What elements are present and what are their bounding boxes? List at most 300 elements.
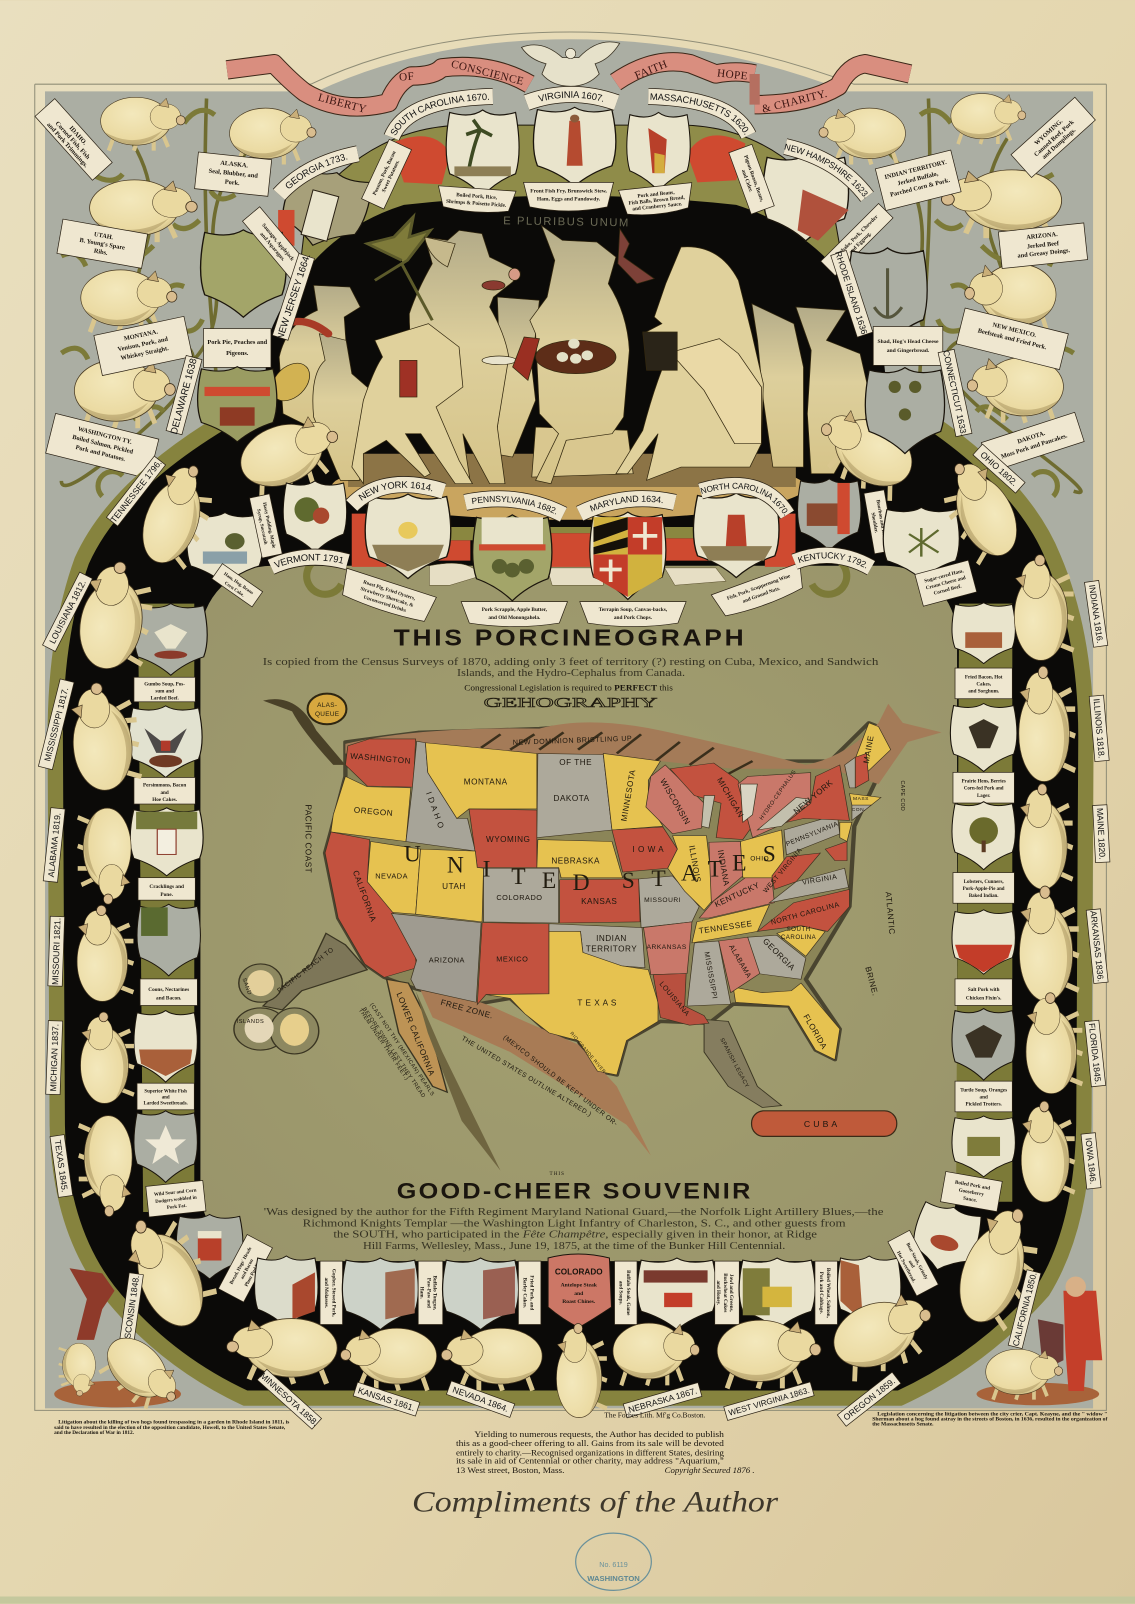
shield: Colorado: and: [574, 1291, 584, 1297]
Rhode Island shield: [848, 248, 927, 345]
food label: Buffalo Steak, Game: [625, 1270, 631, 1316]
food: Virginia: Ham, Eggs and Pandowdy.: [537, 197, 601, 203]
food label: Cracklings and: [149, 884, 184, 890]
food: New Jersey: [203, 329, 271, 367]
state banner: [1089, 695, 1109, 762]
state names: I O W A: [632, 845, 664, 854]
Spanish Legacy leg: [704, 1019, 782, 1107]
banner: Maryland: MARYLAND 1634.: [590, 496, 663, 512]
food label: Boiled Wheat, Salmon,: [825, 1268, 831, 1318]
food label: [218, 1234, 272, 1302]
food label: Pone.: [160, 892, 174, 898]
pig: West Virginia: [717, 1320, 821, 1388]
title: THIS PORCINEOGRAPH: [394, 625, 746, 651]
food label: Cakes,: [976, 681, 992, 687]
state names: WASHINGTON: [350, 751, 411, 766]
state banner: [50, 1135, 73, 1197]
pig: Dakota: [967, 357, 1063, 423]
banner: New York: [346, 476, 446, 512]
state names: CON.: [852, 807, 866, 813]
pig: California: [947, 1193, 1051, 1340]
food label: Baked Indian.: [969, 894, 998, 899]
footnote left: [54, 1421, 290, 1436]
shield: [134, 604, 207, 675]
food label: Gumbo Soup, Pos-: [144, 681, 185, 687]
food label: Lobsters, Cunners,: [964, 880, 1004, 885]
shield: Tennessee: [187, 513, 263, 584]
Sandwich Islands: [234, 964, 319, 1054]
food: Massachusetts: [619, 183, 695, 218]
food: New Hampshire tag: [729, 144, 774, 214]
front pig left: [233, 408, 348, 503]
pig: Mississippi: [68, 680, 142, 793]
food label: Gooseberry: [958, 1187, 985, 1198]
publisher note: its sale in aid of Centennial or other charity, may address "Aquarium,": [456, 1457, 724, 1466]
pink ribbon motto: FAITH: [633, 58, 669, 82]
coastline: [325, 723, 891, 1075]
label: Wyoming: WYOMING.: [1033, 118, 1065, 147]
state names: INDIAN: [596, 934, 627, 943]
state banner: [1081, 1133, 1101, 1189]
shield: [129, 706, 202, 777]
state names: ISLANDS: [237, 1019, 264, 1025]
food: New Jersey: Pigeons.: [226, 350, 249, 357]
state names: PACIFIC REACH TO: [276, 946, 335, 995]
state names: MASS: [853, 796, 869, 802]
food label: [320, 1261, 343, 1325]
motto: E PLURIBUS UNUM: [503, 215, 630, 229]
banner: Delaware: DELAWARE 1638.: [169, 355, 200, 436]
vines left: [61, 99, 245, 496]
wee pig on right: [654, 339, 761, 444]
state names: CAROLINA: [781, 934, 817, 941]
food label: Chicken Fixin's.: [966, 995, 1002, 1001]
fish: [618, 229, 654, 284]
shield: [637, 1258, 717, 1330]
label: Utah: UTAH.: [93, 231, 114, 241]
New Jersey shield: [201, 230, 286, 317]
green strip at bottom edge: [0, 1596, 1135, 1604]
state names: KANSAS: [581, 897, 617, 906]
state names: DAKOTA: [554, 794, 590, 803]
state names: MISSISSIPPI: [702, 951, 719, 1000]
label: Washington Territory: [46, 413, 159, 479]
shield: Colorado: COLORADO: [555, 1267, 603, 1276]
souvenir description: Richmond Knights Templar —the Washington Light Infantry of Charleston, S. C., and other guests from: [303, 1218, 846, 1229]
shield: [837, 1256, 901, 1328]
state names: MAINE: [862, 735, 876, 764]
food label: and Molasses.: [323, 1278, 329, 1309]
label: Arizona: ARIZONA.: [1026, 231, 1058, 241]
food label: Plum Pudding.: [244, 1258, 264, 1288]
food label: [137, 1083, 194, 1110]
shield: [952, 603, 1015, 664]
shield: [950, 704, 1017, 772]
Connecticut shield: [865, 368, 945, 454]
state names: ATLANTIC: [884, 891, 896, 935]
food: Massachusetts: Fish Balls, Brown Bread,: [628, 195, 686, 207]
state names: LOWER CALIFORNIA: [394, 991, 436, 1077]
label: Utah: Ribs.: [93, 248, 109, 257]
food: Pennsylvania: Pork Scrapple, Apple Butter,: [482, 607, 548, 613]
signature: Compliments of the Author: [412, 1487, 779, 1519]
shield: Pennsylvania: [473, 515, 552, 601]
shield: Colorado: Roast Chines.: [562, 1299, 596, 1305]
state names: NEW DOMINION BRISTLING UP: [513, 735, 632, 747]
state names: NEBRASKA: [551, 856, 600, 865]
souvenir description: [264, 1207, 884, 1252]
state banner: [1085, 580, 1108, 647]
pig: Nevada: [441, 1328, 542, 1390]
corner scene bottom left: pigs and red figure: [54, 1268, 188, 1423]
Mexico strip: [416, 979, 651, 1155]
food label: [518, 1261, 541, 1325]
food label: Larded Sweetbreads.: [144, 1102, 188, 1107]
shield: Maryland: [590, 512, 666, 599]
label: Washington Territory: Boiled Salmon, Pickled: [71, 434, 134, 456]
pink ribbon motto: HOPE: [716, 67, 748, 83]
food: Ohio tag: Shoulder.: [870, 512, 879, 534]
food label: Salt Pork with: [968, 987, 1000, 993]
food label: Sauce.: [963, 1195, 978, 1204]
souvenir heading: THIS: [550, 1171, 565, 1177]
publisher note: entirely to charity.—Recognised organizations in different States, desiring: [456, 1448, 724, 1457]
food label: Corn-fed Pork and: [964, 787, 1004, 792]
pig: Ohio: [930, 448, 1029, 572]
food label: Bread, Hogs' Heads: [229, 1247, 253, 1286]
food: New York: [338, 568, 436, 625]
shield: [130, 808, 203, 876]
sausage: [293, 321, 328, 334]
shield: Virginia: [533, 107, 616, 186]
shield: [255, 1256, 318, 1328]
pink ribbon motto: & CHARITY.: [761, 88, 829, 116]
pig: Nebraska: [613, 1323, 700, 1385]
footnote left: said to have resulted in the election of the opposition candidate, Howell, to the United States Senate,: [54, 1426, 285, 1431]
state names: BEFORE SWINE LEST THEY TREAD: [361, 1007, 426, 1099]
small pig left 3: [352, 324, 472, 484]
shield: [952, 910, 1015, 974]
state names: WEST VIRGINIA: [762, 847, 804, 894]
food: Ohio tag: Bourbon and Boiled: [875, 499, 888, 544]
food: Georgia side tag: Possum, Pork, Bacon: [372, 150, 398, 196]
shield: Massachusetts: [627, 112, 690, 191]
label: Alaska: ALASKA.: [220, 160, 249, 170]
banner: Maryland: [576, 490, 677, 521]
label: Dakota: Moss Pork and Pancakes.: [1000, 432, 1069, 461]
label: Indian Territory: INDIAN TERRITORY.: [884, 159, 948, 181]
label: Washington Territory: WASHINGTON TY.: [77, 426, 133, 446]
food label: [815, 1261, 837, 1325]
state names: ALABAMA: [727, 943, 753, 980]
food label: [134, 777, 195, 804]
shield: Kentucky: [883, 508, 959, 579]
shield: [134, 1011, 197, 1082]
label: Montana: Whiskey Straight.: [120, 345, 170, 362]
shield: star: [134, 1111, 197, 1182]
label: Idaho: [35, 99, 112, 180]
label: Dakota: [981, 412, 1084, 472]
state names: RIO GRANDE RIVER: [569, 1031, 607, 1074]
food: North Carolina: and Ground Nuts.: [742, 585, 782, 605]
state banner: NEBRASKA 1867.: [627, 1386, 698, 1415]
label: Wyoming: Canned Beef, Pork: [1033, 118, 1076, 158]
food label: Prairie Hens, Berries: [962, 780, 1006, 785]
palm: [367, 217, 432, 320]
food label: [953, 873, 1014, 903]
eggs: [557, 339, 593, 364]
state names: NEW YORK: [792, 778, 835, 816]
state names: ARKANSAS: [647, 944, 687, 951]
food label: Bear Steak, Grizzly: [904, 1242, 928, 1281]
state names: MONTANA: [464, 778, 508, 787]
red cloth: [513, 337, 539, 380]
pig: Florida: [1026, 993, 1082, 1094]
pig: New Mexico: [965, 264, 1056, 332]
ground glow under central pigs: [331, 454, 806, 520]
pig: Tennessee: [131, 453, 224, 577]
small pig right 1: [752, 304, 804, 467]
label: Indian Territory: Parched Corn & Pork.: [889, 177, 951, 199]
left pig mouth: [482, 281, 505, 290]
small pig left 1: [279, 285, 360, 427]
state names: CAPE COD: [899, 780, 905, 811]
food: Rhode Island 2: [873, 327, 943, 365]
banner: New Jersey: NEW JERSEY 1664.: [275, 253, 313, 341]
title description: Is copied from the Census Surveys of 1870, adding only 3 feet of territory (?) resting on Cuba, Mexico, and Sandwich: [263, 657, 878, 668]
shield: North Carolina: [693, 493, 779, 578]
state names: SPANISH LEGACY: [718, 1037, 750, 1089]
state banner: LOUISIANA 1812.: [47, 578, 88, 645]
state names: GEORGIA: [761, 937, 797, 973]
banner: New Hampshire: NEW HAMPSHIRE 1623.: [784, 144, 868, 198]
red and olive backing: [307, 514, 847, 594]
food label: Boiled Pork and: [954, 1180, 991, 1192]
state names: WISCONSIN: [658, 777, 692, 826]
lower state shields row: [186, 476, 977, 627]
library stamp: No. 6119: [599, 1561, 628, 1569]
big pig right: Bacon: [616, 247, 763, 480]
state banner: NEVADA 1864.: [451, 1384, 510, 1414]
pig: Missouri: [77, 905, 133, 1001]
Canada bristle band: [345, 704, 942, 784]
banner: Virginia: VIRGINIA 1607.: [538, 91, 603, 102]
label: Utah: [57, 219, 148, 268]
food label: Wild Sour and Corn: [154, 1188, 197, 1198]
state names: FREE ZONE.: [440, 998, 494, 1021]
pig: Indiana: [1014, 555, 1074, 660]
state banner: FLORIDA 1845.: [1087, 1023, 1103, 1085]
tail: [263, 699, 345, 765]
printer credit: The Forbes Lith. Mf'g Co.Boston.: [604, 1412, 706, 1420]
state names: LOUISIANA: [658, 980, 691, 1018]
banner: Vermont: VERMONT 1791: [274, 554, 343, 568]
pig: Iowa: [1021, 1101, 1075, 1202]
food label: Buckwheat Cakes: [722, 1273, 728, 1312]
pig: Michigan: [81, 1012, 134, 1103]
Alaska: QUEUE: [315, 711, 340, 718]
black central dome: [256, 196, 900, 512]
food: North Carolina: Fish, Pork, Scuppernong Wine: [726, 573, 792, 602]
pig: Texas: [79, 1116, 132, 1217]
library stamp: [576, 1533, 651, 1590]
state names: OHIO: [750, 855, 769, 862]
black ring with olive border: [55, 411, 1086, 1398]
footnote right: Legislation concerning the litigation between the city crier, Capt. Keayne, and the " widow ": [877, 1413, 1108, 1418]
title description: Congressional Legislation is required to PERFECT this: [464, 684, 673, 693]
bottom row of shields and labels: [218, 1230, 938, 1330]
pink ribbon motto: [227, 58, 910, 116]
red and olive strip: [138, 604, 194, 1212]
pink ribbon motto: CONSCIENCE: [450, 58, 525, 88]
state banner: KANSAS 1861.: [357, 1385, 416, 1413]
pig: Indian Territory: [819, 108, 905, 164]
pig: Alaska: [230, 108, 316, 164]
state names: THEM UNDER THEIR FEET.): [357, 1008, 409, 1082]
central pig scene: [264, 217, 872, 487]
food label: and: [980, 1095, 988, 1101]
state banner: MISSISSIPPI 1817.: [42, 686, 70, 762]
publisher note: this as a good-cheer offering to all. Gains from its sale will be devoted: [456, 1439, 724, 1448]
food label: Ham.: [418, 1287, 424, 1300]
state names: T E X A S: [577, 998, 617, 1007]
label: Wyoming: [1011, 97, 1095, 177]
food label: Persimmons, Bacon: [143, 783, 186, 789]
food label: Paw-Paw and: [425, 1278, 431, 1308]
banner: North Carolina: NORTH CAROLINA 1670.: [700, 482, 788, 516]
Cuba: CUBA: [804, 1119, 840, 1129]
label: Alaska: Pork.: [224, 179, 240, 187]
state names: KENTUCKY: [713, 880, 761, 909]
plate: [482, 356, 516, 365]
food label: [418, 1261, 443, 1325]
souvenir heading: GOOD-CHEER SOUVENIR: [397, 1179, 753, 1204]
bottle: [400, 360, 417, 397]
label: Washington Territory: Pork and Potatoes.: [75, 444, 126, 463]
shield: stripes: [176, 1214, 243, 1279]
state names: HYDRO-CEPHALUS: [759, 769, 798, 821]
pink ribbon motto: OF: [399, 70, 415, 84]
state names: MISSOURI: [644, 897, 681, 904]
food: Tennessee tag: Syrup, Succotash: [255, 509, 268, 545]
shield: Colorado: Antelope Steak: [561, 1283, 598, 1289]
food: Georgia: Sausages, Applejack: [260, 223, 295, 262]
banner: Connecticut: CONNECTICUT 1633.: [941, 349, 969, 437]
food: Maryland: Terrapin Soup, Canvas-backs,: [599, 607, 668, 613]
shield: New York: [365, 494, 451, 579]
food label: Pork and Cabbage.: [818, 1272, 824, 1315]
state names: VIRGINIA: [802, 873, 838, 887]
food label: and Bacon: [240, 1258, 255, 1280]
back leg: [416, 991, 501, 1171]
food: Vermont tag: Ham, Hog, Beans: [222, 572, 254, 596]
stump: [532, 427, 633, 477]
state names: SAND: [241, 977, 252, 996]
pig: Alabama: [78, 808, 131, 904]
food label: Hoe Cakes.: [152, 797, 178, 803]
state names: UTAH: [442, 882, 466, 891]
food label: [955, 668, 1012, 699]
food: New Hampshire tag: Pigeon Roasts, Beans,: [742, 154, 765, 203]
state banner: OHIO 1802.: [978, 449, 1020, 488]
food label: [953, 772, 1014, 803]
food: South Carolina: Shrimps & Poisette Pickle.: [446, 199, 507, 209]
food label: Buffalo Tongue,: [432, 1275, 438, 1311]
state banner: IOWA 1846.: [1084, 1137, 1098, 1185]
food: Massachusetts: Pork and Beans,: [637, 190, 676, 200]
bristles: [481, 732, 753, 776]
label: Montana: MONTANA.: [123, 328, 159, 342]
state banner: [46, 1021, 63, 1095]
souvenir description: 'Was designed by the author for the Fifth Regiment Maryland National Guard,—the Norfolk Light Artillery Blues,—the: [264, 1207, 884, 1218]
corner scene bottom right: pig and soldier: [977, 1276, 1102, 1405]
Georgia shield and frame: [273, 164, 377, 254]
pot: [643, 332, 677, 370]
food label: Pork Fat.: [167, 1204, 187, 1211]
food label: and: [161, 790, 169, 796]
food label: [888, 1230, 938, 1296]
food label: and Soups.: [618, 1281, 624, 1305]
state names: NORTH CAROLINA: [770, 901, 841, 927]
banner: Kentucky: [792, 546, 876, 575]
state names: CALIFORNIA: [351, 869, 378, 923]
footnote right: the Massachusetts Senate.: [872, 1423, 934, 1428]
title description: [263, 657, 878, 693]
state names: NEVADA: [375, 872, 408, 881]
state banner: TEXAS 1845.: [53, 1139, 70, 1193]
state banner: [38, 679, 74, 770]
label: Arizona: and Greasy Doings.: [1017, 247, 1071, 260]
food label: [955, 979, 1012, 1005]
state banner: MAINE 1820.: [1095, 808, 1108, 860]
Cuba: [752, 1111, 897, 1136]
publisher note: 13 West street, Boston, Mass.: [456, 1466, 564, 1475]
state names: PENNSYLVANIA: [785, 821, 840, 848]
food label: [140, 979, 197, 1005]
label: Montana: Venison, Pork, and: [117, 336, 169, 353]
state names: FLORIDA: [801, 1013, 829, 1051]
state names: BRINE.: [863, 966, 880, 997]
publisher note: Copyright Secured 1876 .: [665, 1466, 755, 1475]
food label: Fried Bacon, Hot: [965, 674, 1003, 680]
applejack flask: [264, 357, 317, 407]
ring ribbons with state names: [38, 444, 1110, 1429]
food: Vermont tag: [212, 564, 263, 607]
label: Dakota: DAKOTA.: [1017, 430, 1047, 446]
state banner: INDIANA 1816.: [1087, 584, 1105, 644]
food: New Hampshire tag: and Cider.: [740, 169, 754, 194]
food label: Lager.: [977, 794, 990, 799]
shield: [952, 802, 1015, 870]
library stamp: WASHINGTON: [587, 1574, 640, 1583]
food label: Dodgers wobbled in: [155, 1196, 197, 1205]
food label: [134, 677, 195, 702]
label: Idaho: Corned Fish, Fish: [54, 120, 92, 161]
food: Maryland: and Pork Chops.: [614, 615, 653, 621]
small pig right 2: [796, 307, 872, 474]
food label: Jowl and Greens,: [728, 1274, 734, 1312]
food: Pennsylvania: and Old Monongahela.: [488, 615, 541, 621]
small pig behind: [493, 297, 539, 457]
food label: [715, 1261, 739, 1325]
shield: South Carolina: [446, 110, 519, 196]
pig: Arizona: [941, 170, 1062, 238]
food: Kentucky tag: Sugar-cured Ham,: [924, 568, 965, 584]
food label: and: [907, 1260, 915, 1269]
eagle: [521, 42, 620, 86]
pig: Wisconsin: [115, 1199, 222, 1340]
banner: South Carolina: SOUTH CAROLINA 1670.: [390, 94, 489, 136]
